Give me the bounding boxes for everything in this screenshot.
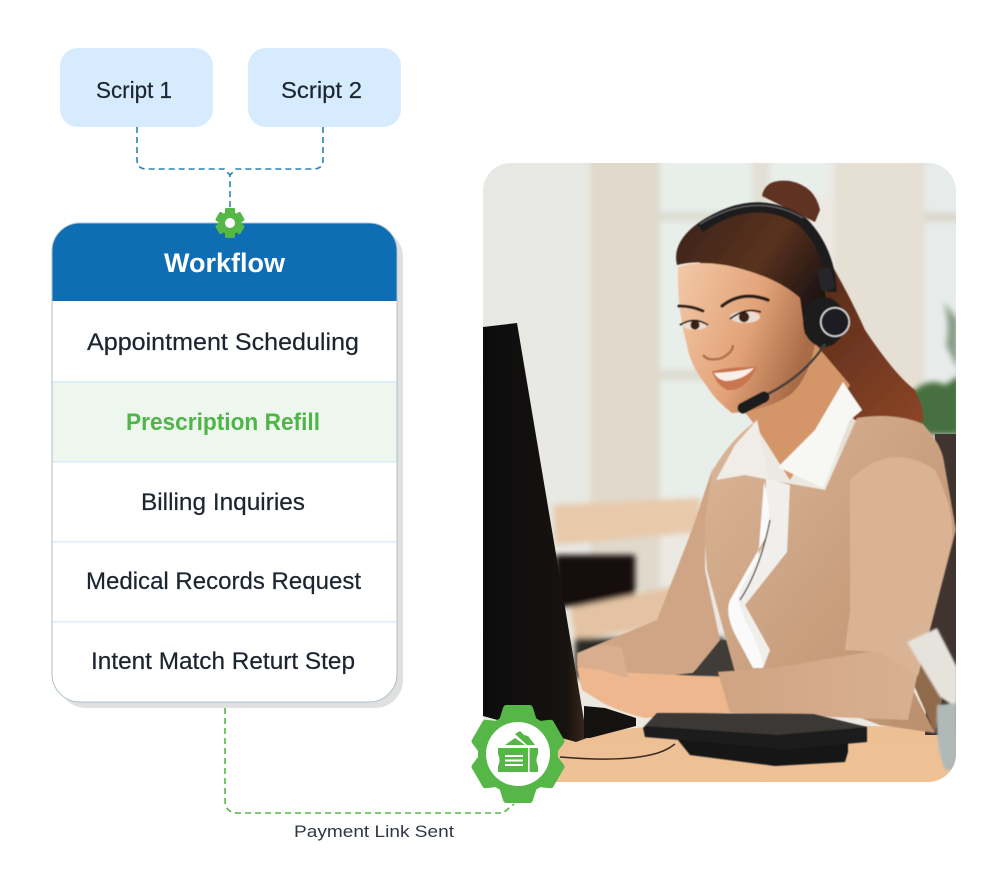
card header	[52, 223, 397, 301]
nose shadow	[703, 345, 733, 359]
desk	[556, 726, 956, 782]
headset	[700, 205, 850, 408]
row: appointment scheduling: Appointment Scheduling	[87, 329, 359, 356]
under arm gap	[695, 640, 735, 675]
workflow card	[52, 223, 403, 708]
background plant	[912, 302, 956, 438]
cable	[560, 744, 675, 759]
keyboard	[584, 706, 636, 738]
shirt placket	[728, 482, 769, 668]
connector: payment link	[225, 708, 514, 813]
left sleeve	[577, 467, 720, 680]
hair front	[676, 205, 826, 335]
photo: agent with headset at desk	[475, 155, 965, 790]
heading: Workflow	[164, 248, 286, 278]
script box 1	[60, 48, 213, 127]
script box 2	[248, 48, 401, 127]
row: intent match: Intent Match Returt Step	[91, 648, 355, 675]
row: billing inquiries: Billing Inquiries	[141, 489, 305, 516]
dark sweater folds	[914, 664, 942, 733]
row: medical records request: Medical Records Request	[86, 568, 361, 595]
neck	[744, 344, 850, 480]
monitor	[483, 323, 587, 742]
hair back	[700, 212, 923, 422]
icon: ticket	[498, 731, 538, 772]
shirt collar	[778, 382, 862, 488]
face and neck	[678, 263, 815, 413]
right arm upper	[845, 457, 952, 676]
cuff left	[577, 645, 628, 678]
forearm and hand	[577, 665, 732, 718]
hair bun	[762, 181, 820, 222]
script box 2: Script 2	[281, 77, 362, 103]
icon: payment gear	[467, 705, 569, 803]
background desks	[553, 498, 725, 678]
brows	[679, 296, 768, 311]
mouth	[712, 367, 757, 390]
row: prescription refill: Prescription Refill	[126, 409, 320, 436]
bottle	[907, 628, 957, 770]
highlighted row	[52, 382, 397, 461]
shirt inner	[735, 478, 790, 668]
tablet device	[643, 713, 867, 766]
eyes	[680, 311, 761, 330]
label: payment link sent: Payment Link Sent	[294, 822, 454, 841]
script box 1: Script 1	[96, 77, 172, 103]
connector: scripts to workflow	[137, 127, 323, 208]
chair	[925, 434, 957, 735]
icon: small gear	[215, 208, 245, 238]
sweater torso	[703, 416, 956, 733]
agent figure	[577, 181, 956, 733]
right sleeve	[718, 650, 917, 720]
